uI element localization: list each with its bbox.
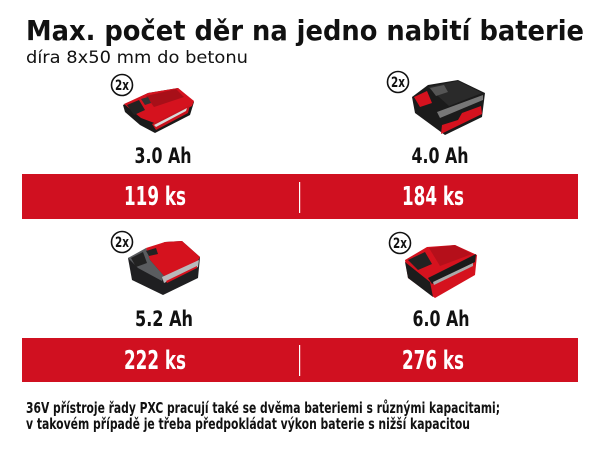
icon: 6.0 Ah battery — [390, 232, 477, 298]
footnote — [26, 399, 500, 433]
icon: 3.0 Ah battery — [112, 74, 194, 133]
bar: 5.2 Ah and 6.0 Ah results — [22, 338, 578, 382]
label: 5.2 Ah: 5.2 Ah — [135, 307, 193, 331]
label: 3.0 Ah: 3.0 Ah — [134, 144, 192, 168]
label: 6.0 Ah: 6.0 Ah — [412, 307, 470, 331]
label: 4.0 Ah: 4.0 Ah — [412, 144, 468, 168]
bar: 3.0 Ah and 4.0 Ah results: 184 ks — [402, 182, 464, 212]
bar: 5.2 Ah and 6.0 Ah results: 222 ks — [124, 346, 186, 376]
badge: 2x: 2x — [393, 236, 407, 252]
subtitle: díra 8x50 mm do betonu — [26, 48, 248, 68]
icon: 5.2 Ah battery — [112, 232, 200, 295]
bar: 3.0 Ah and 4.0 Ah results — [22, 174, 578, 219]
icon: 4.0 Ah battery — [388, 72, 485, 135]
bar: 3.0 Ah and 4.0 Ah results: 119 ks — [124, 182, 186, 212]
badge: 2x: 2x — [391, 75, 405, 91]
bar: 5.2 Ah and 6.0 Ah results: 276 ks — [402, 346, 464, 376]
badge: 2x: 2x — [115, 78, 129, 94]
badge: 2x: 2x — [115, 235, 129, 251]
